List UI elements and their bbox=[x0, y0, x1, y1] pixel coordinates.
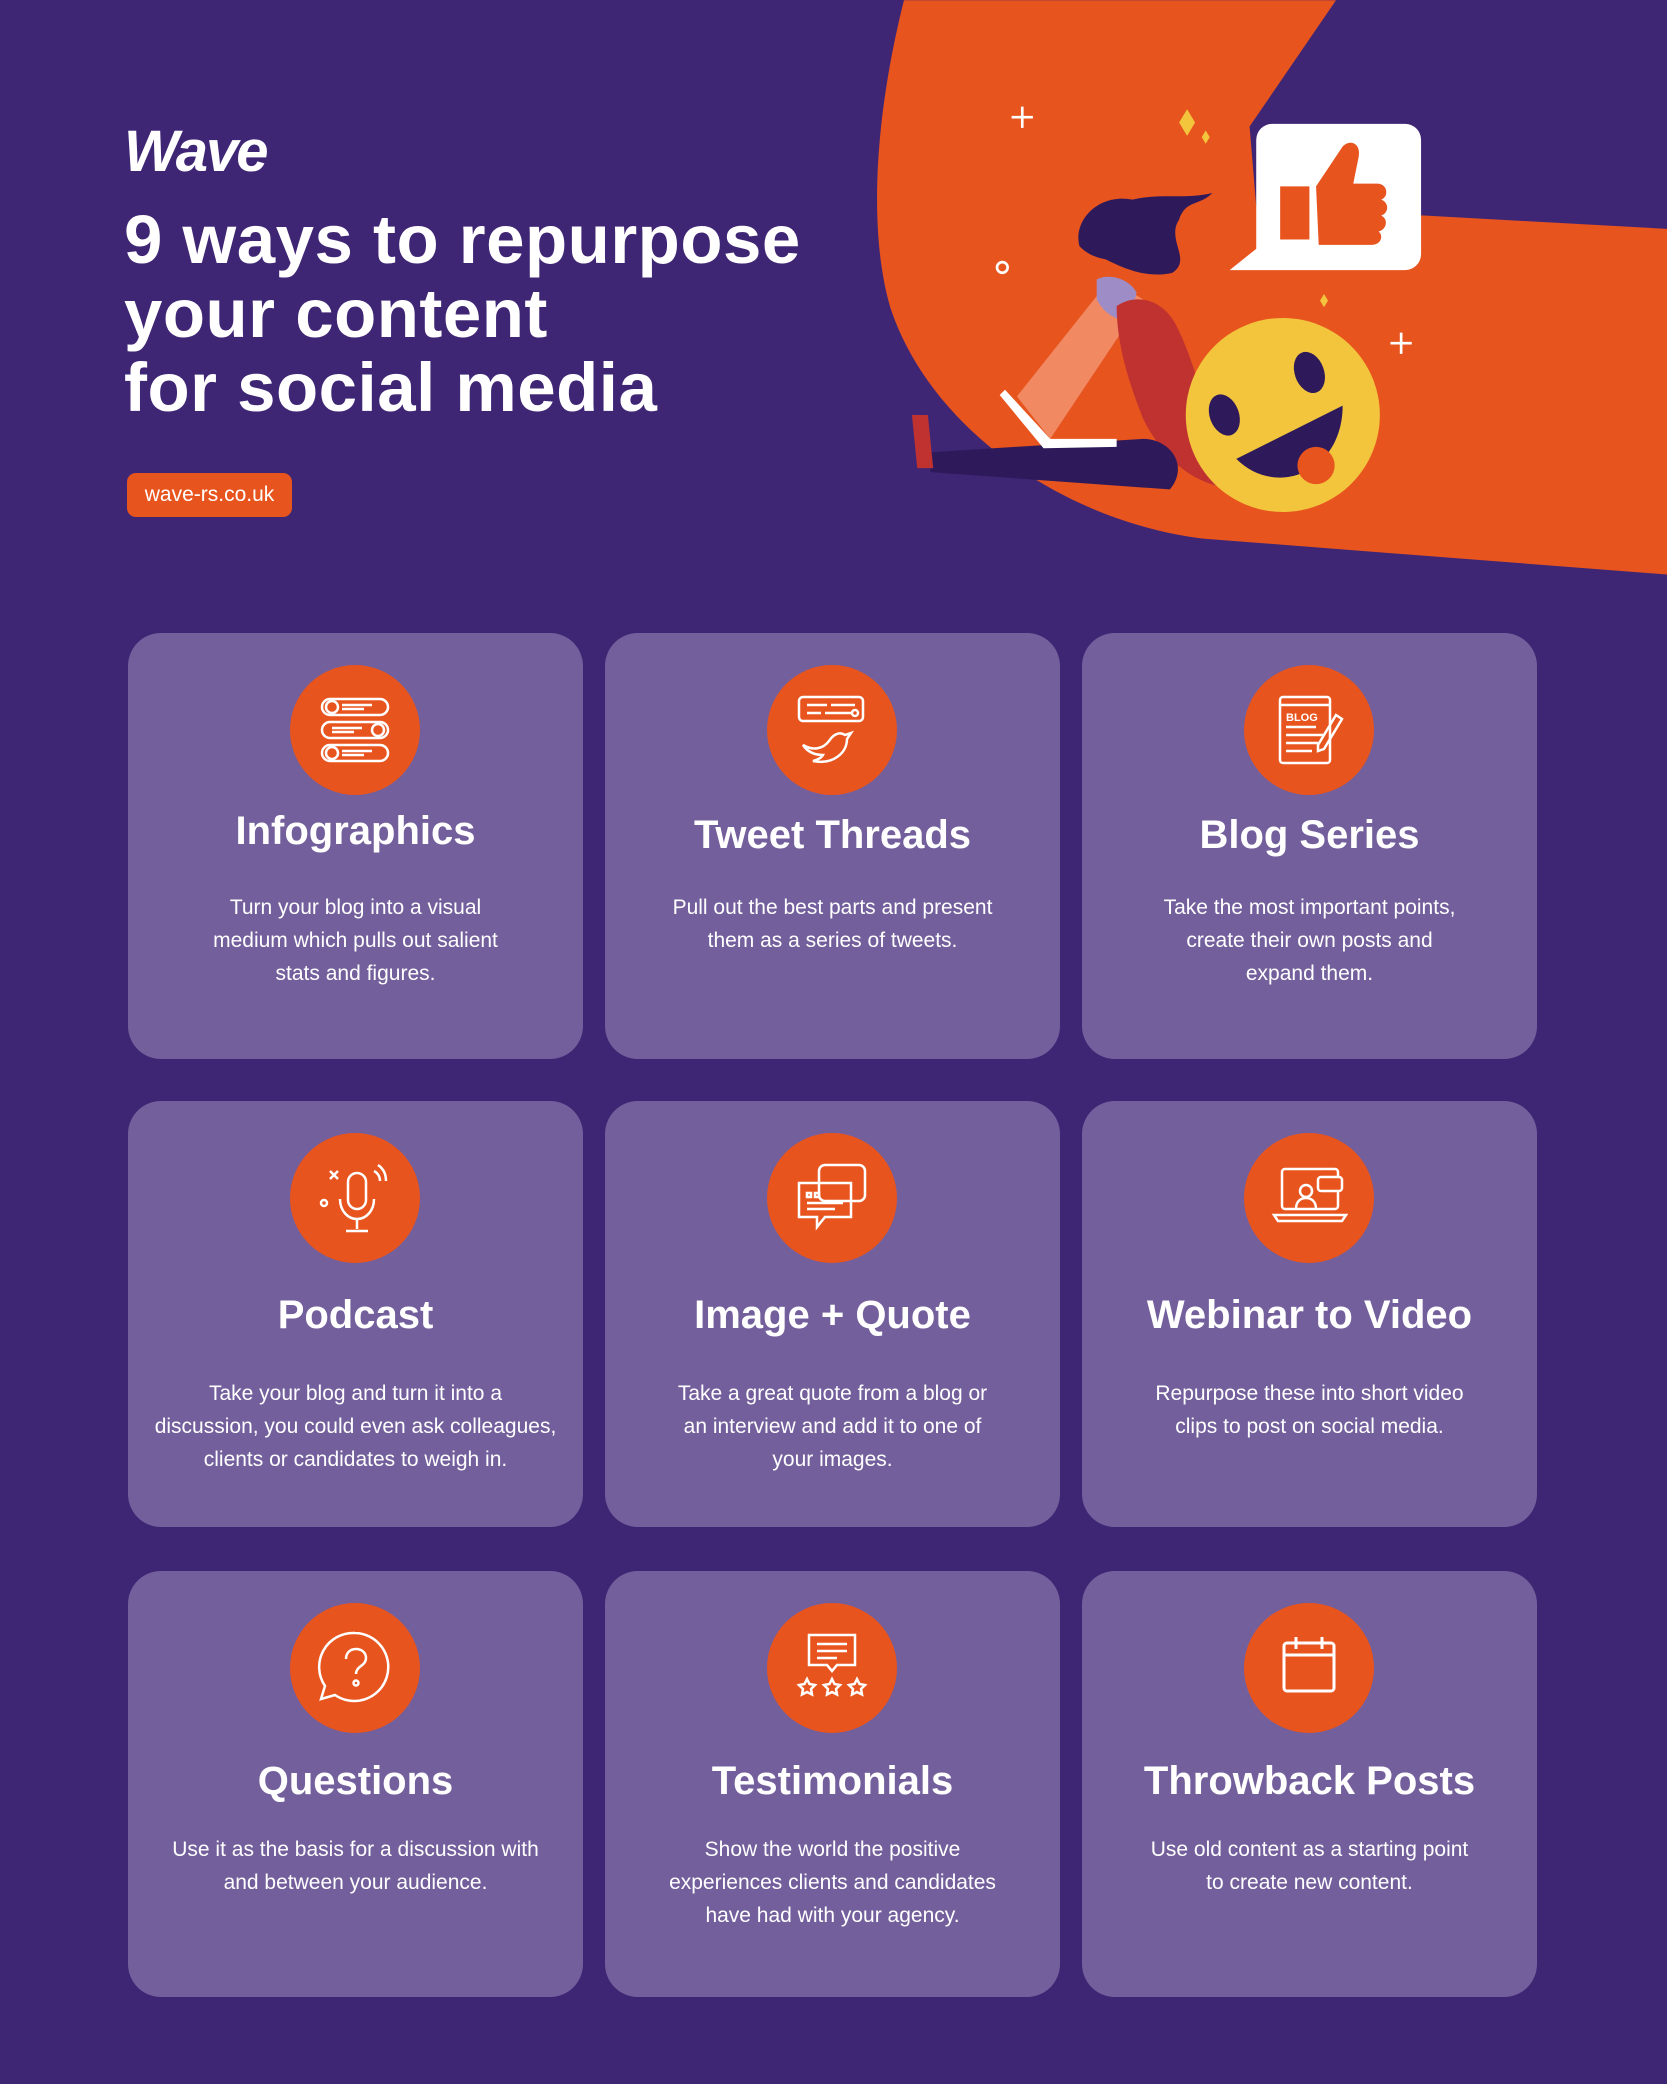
card: Questions: Use it as the basis for a discussion with bbox=[172, 1838, 539, 1861]
card: Webinar to Video: Webinar to Video bbox=[1147, 1293, 1472, 1337]
icon: microphone bbox=[290, 1133, 420, 1263]
card: Blog Series: Blog Series bbox=[1199, 813, 1420, 857]
card: Podcast: clients or candidates to weigh in. bbox=[204, 1448, 507, 1471]
card: Blog Series: expand them. bbox=[1246, 962, 1373, 985]
card: Image + Quote bbox=[605, 1101, 1060, 1527]
card: Throwback Posts: Throwback Posts bbox=[1144, 1759, 1475, 1803]
card: Tweet Threads: them as a series of tweets. bbox=[708, 929, 957, 952]
logo: Wave bbox=[124, 119, 266, 184]
card: Tweet Threads: Tweet Threads bbox=[694, 813, 971, 857]
card: Podcast: Take your blog and turn it into a bbox=[209, 1382, 502, 1405]
card: Testimonials bbox=[605, 1571, 1060, 1997]
icon: bird bbox=[767, 665, 897, 795]
icon: laptop bbox=[1244, 1133, 1374, 1263]
card: Blog Series bbox=[1082, 633, 1537, 1059]
smiley bbox=[1186, 318, 1380, 512]
card: Infographics bbox=[128, 633, 583, 1059]
card: Tweet Threads: Pull out the best parts and present bbox=[673, 896, 992, 919]
card: Podcast: discussion, you could even ask colleagues, bbox=[155, 1415, 556, 1438]
icon: quote bubbles bbox=[767, 1133, 897, 1263]
speech bubble bbox=[1230, 124, 1421, 270]
card: Questions: Questions bbox=[258, 1759, 453, 1803]
card: Throwback Posts: Use old content as a starting point bbox=[1151, 1838, 1468, 1861]
url button: wave-rs.co.uk bbox=[145, 483, 274, 506]
card: Throwback Posts bbox=[1082, 1571, 1537, 1997]
card: Podcast bbox=[128, 1101, 583, 1527]
icon: list bbox=[290, 665, 420, 795]
card: Podcast: Podcast bbox=[278, 1293, 433, 1337]
card: Tweet Threads bbox=[605, 633, 1060, 1059]
title: your content bbox=[124, 275, 548, 352]
card: Testimonials: Testimonials bbox=[712, 1759, 953, 1803]
card: Image + Quote: Take a great quote from a blog or bbox=[678, 1382, 987, 1405]
icon: blog bbox=[1244, 665, 1374, 795]
card: Infographics: medium which pulls out salient bbox=[213, 929, 498, 952]
card: Infographics: stats and figures. bbox=[276, 962, 435, 985]
card: Image + Quote: your images. bbox=[772, 1448, 893, 1471]
card: Image + Quote: an interview and add it to one of bbox=[684, 1415, 981, 1438]
icon: review stars bbox=[767, 1603, 897, 1733]
header illustration bbox=[877, 0, 1667, 574]
card: Image + Quote: Image + Quote bbox=[694, 1293, 971, 1337]
card: Webinar to Video: clips to post on social media. bbox=[1175, 1415, 1444, 1438]
card: Webinar to Video: Repurpose these into short video bbox=[1155, 1382, 1464, 1405]
card: Infographics: Infographics bbox=[235, 809, 476, 853]
card: Infographics: Turn your blog into a visual bbox=[230, 896, 481, 919]
card: Webinar to Video bbox=[1082, 1101, 1537, 1527]
card: Blog Series: Take the most important points, bbox=[1164, 896, 1455, 919]
icon: question bubble bbox=[290, 1603, 420, 1733]
orange swoosh bbox=[877, 0, 1667, 575]
url button bbox=[127, 473, 292, 517]
card: Blog Series: create their own posts and bbox=[1186, 929, 1433, 952]
icon: calendar bbox=[1244, 1603, 1374, 1733]
person bbox=[912, 193, 1216, 489]
card: Testimonials: experiences clients and candidates bbox=[669, 1871, 996, 1894]
icon: blog: BLOG bbox=[1286, 712, 1318, 724]
card: Testimonials: Show the world the positive bbox=[705, 1838, 960, 1861]
card: Testimonials: have had with your agency. bbox=[705, 1904, 960, 1927]
card: Questions bbox=[128, 1571, 583, 1997]
card: Throwback Posts: to create new content. bbox=[1206, 1871, 1413, 1894]
title bbox=[124, 201, 801, 426]
title: for social media bbox=[124, 349, 657, 426]
card: Questions: and between your audience. bbox=[224, 1871, 487, 1894]
title: 9 ways to repurpose bbox=[124, 201, 801, 278]
